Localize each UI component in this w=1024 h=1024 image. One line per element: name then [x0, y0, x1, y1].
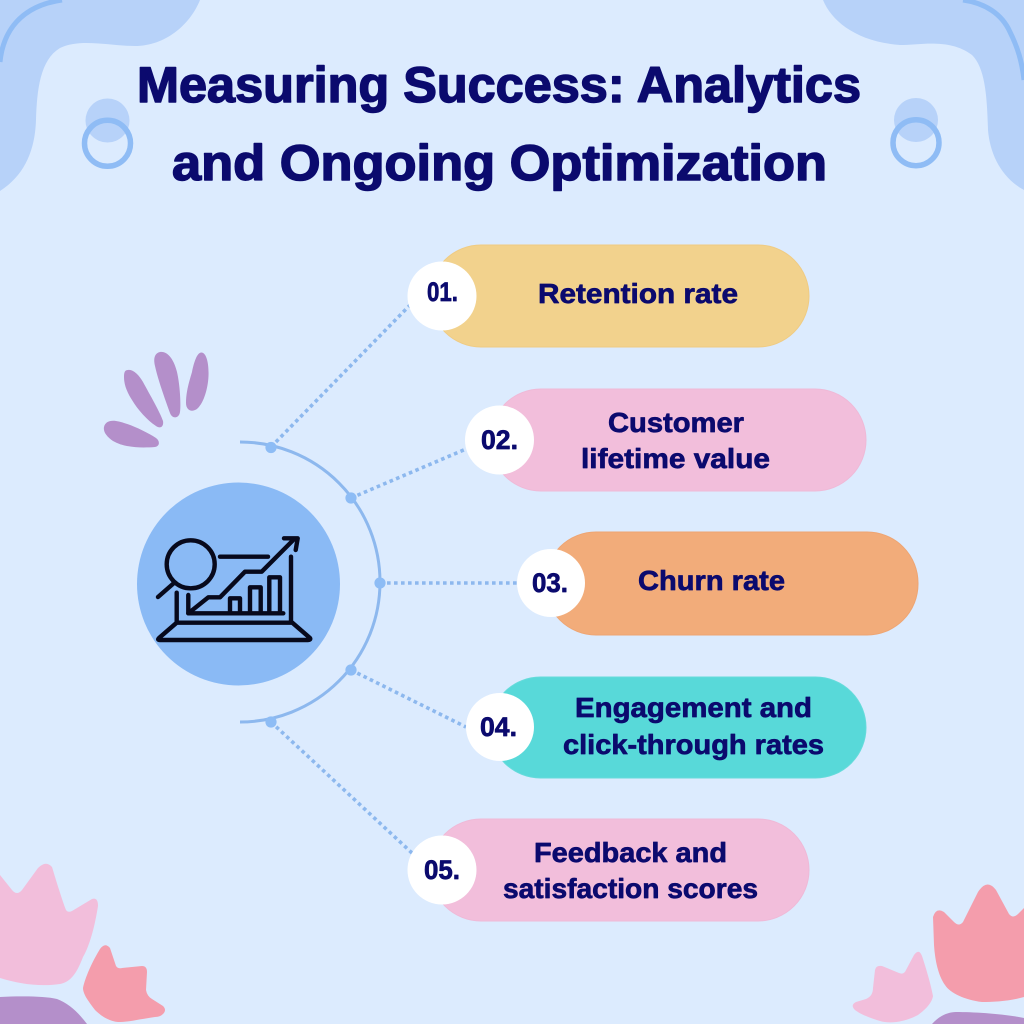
dotted connector 5: [271, 722, 412, 853]
item 5: feedback and satisfaction scores: 05.: [424, 855, 460, 885]
top-right corner decoration: [823, 0, 1024, 190]
dotted connector 4: [351, 670, 466, 727]
item 1: retention rate: Retention rate: [538, 278, 738, 309]
bottom-right floral decoration: [853, 884, 1024, 1024]
item 5: feedback and satisfaction scores: satisfaction scores: [503, 873, 758, 904]
dotted connector 1: [271, 303, 412, 447]
item 5: feedback and satisfaction scores: [408, 819, 809, 921]
item 2: customer lifetime value: Customer: [608, 407, 744, 438]
item 2: customer lifetime value: lifetime value: [581, 443, 770, 474]
item 3: churn rate: 03.: [532, 568, 568, 598]
bottom-left floral decoration: [0, 864, 165, 1024]
title: and Ongoing Optimization: [172, 135, 827, 191]
top-left corner decoration: [0, 0, 200, 191]
item 1: retention rate: [408, 245, 809, 347]
item 4: engagement and click-through rates: [466, 677, 866, 778]
connector arc: [240, 442, 380, 722]
item 5: feedback and satisfaction scores: Feedback and: [534, 837, 727, 868]
right ring ornament: [893, 98, 939, 166]
dotted connector 2: [351, 449, 466, 498]
item 2: customer lifetime value: 02.: [481, 425, 518, 455]
item 3: churn rate: Churn rate: [638, 565, 785, 596]
item 1: retention rate: 01.: [427, 277, 458, 307]
item 3: churn rate: [517, 532, 918, 635]
dotted connector 3: [380, 581, 517, 585]
purple petals decoration: [104, 352, 209, 447]
item 4: engagement and click-through rates: 04.: [480, 712, 517, 742]
title: Measuring Success: Analytics: [137, 57, 861, 113]
item 4: engagement and click-through rates: click-through rates: [563, 729, 824, 760]
central circle: [137, 482, 340, 686]
item 4: engagement and click-through rates: Engagement and: [575, 692, 812, 723]
icon: analytics laptop with magnifier: [158, 538, 310, 640]
item 2: customer lifetime value: [465, 389, 866, 491]
title: [137, 57, 861, 191]
left ring ornament: [84, 98, 130, 166]
arc nodes: [265, 442, 386, 728]
